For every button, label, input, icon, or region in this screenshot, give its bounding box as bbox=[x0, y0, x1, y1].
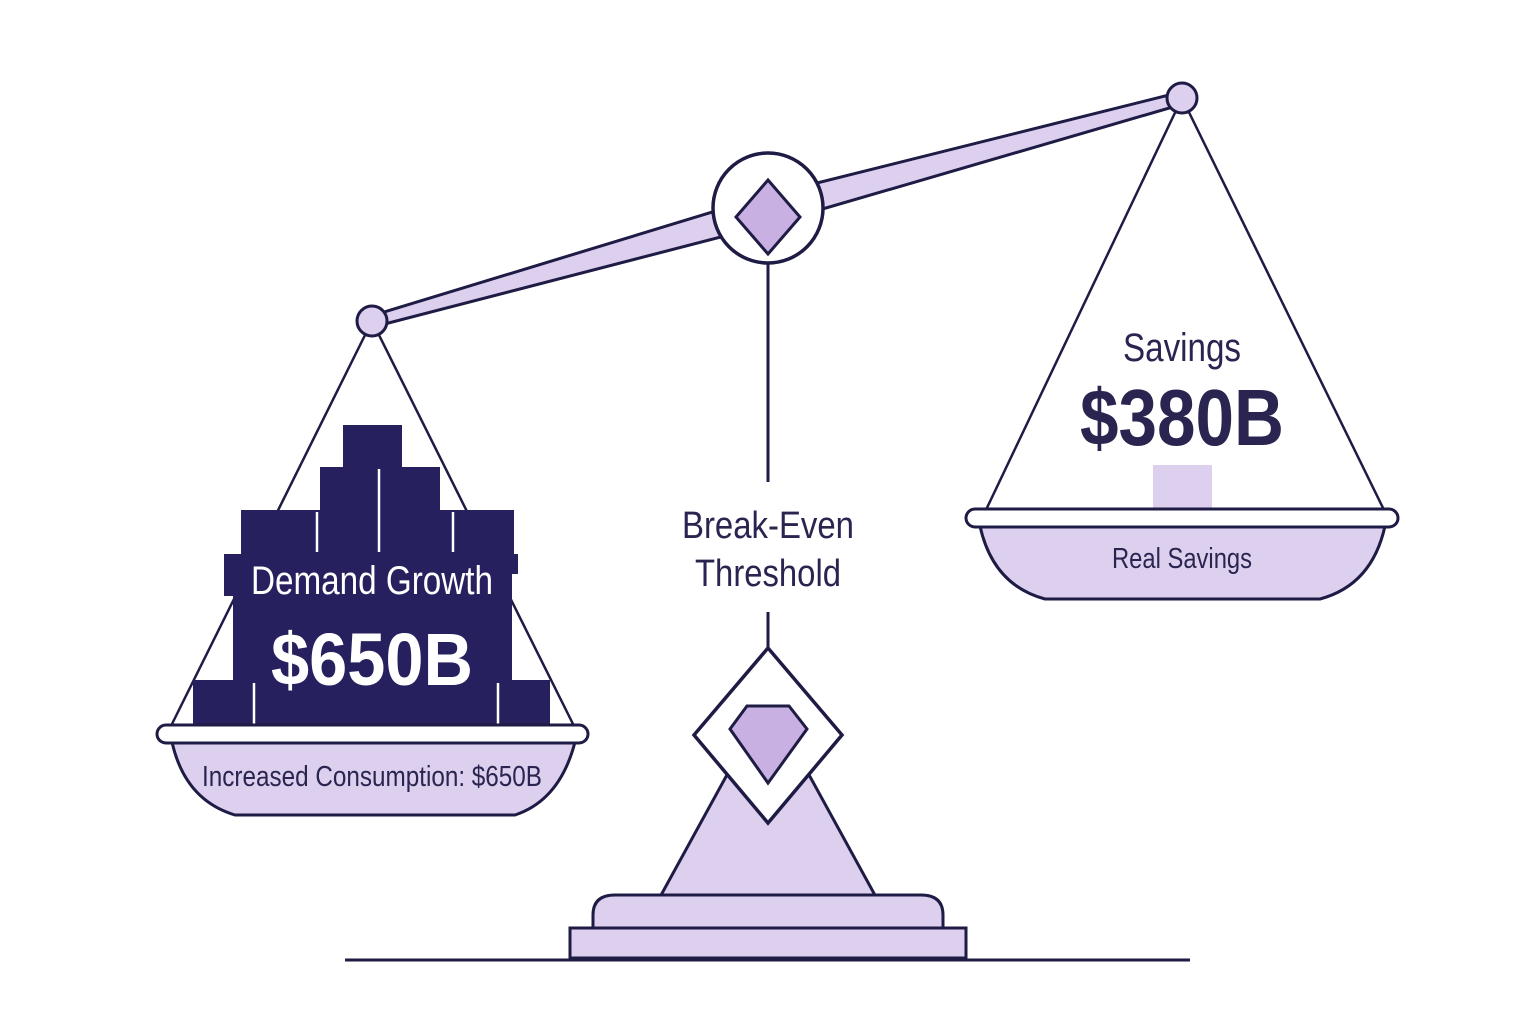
right strings bbox=[985, 98, 1385, 512]
right pan: small savings block bbox=[1153, 465, 1212, 509]
scale base bbox=[570, 700, 966, 958]
ground line bbox=[345, 958, 1190, 962]
label: break-even threshold: Threshold bbox=[695, 553, 841, 595]
right pan: savings label: Savings bbox=[1123, 326, 1241, 370]
right pan: savings label: $380B bbox=[1080, 373, 1284, 462]
vertical pointer line bbox=[766, 262, 770, 648]
right pan bowl: Real Savings bbox=[1112, 543, 1252, 575]
pivot circle with diamond bbox=[713, 153, 823, 263]
beam bbox=[371, 92, 1183, 327]
right pan bowl bbox=[966, 509, 1398, 599]
left pan: demand growth blocks bbox=[193, 425, 550, 726]
left pan bowl bbox=[157, 725, 588, 815]
left strings bbox=[170, 321, 575, 728]
lower diamond with gem bbox=[694, 648, 842, 823]
left pan: demand growth blocks: $650B bbox=[271, 618, 473, 701]
label: break-even threshold bbox=[682, 505, 854, 595]
knobs bbox=[357, 83, 1197, 336]
label: break-even threshold: Break-Even bbox=[682, 505, 854, 547]
left pan: demand growth blocks: Demand Growth bbox=[251, 559, 493, 603]
right pan: savings label bbox=[1080, 326, 1284, 462]
left pan bowl: Increased Consumption: $650B bbox=[202, 761, 542, 793]
